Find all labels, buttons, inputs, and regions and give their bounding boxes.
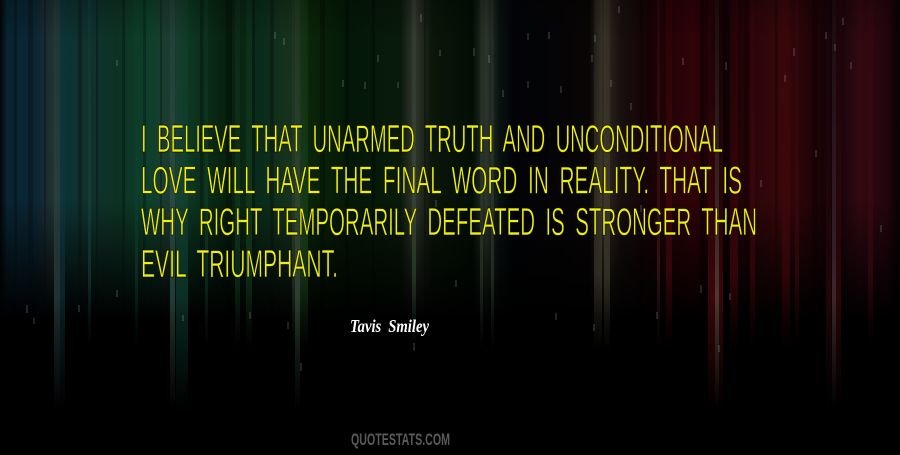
watermark: QUOTESTATS.COM — [351, 431, 450, 449]
quote text — [141, 118, 757, 286]
quote text: EVIL TRIUMPHANT. — [141, 243, 338, 286]
falling specks — [26, 6, 882, 371]
author name: Tavis Smiley — [350, 316, 430, 336]
